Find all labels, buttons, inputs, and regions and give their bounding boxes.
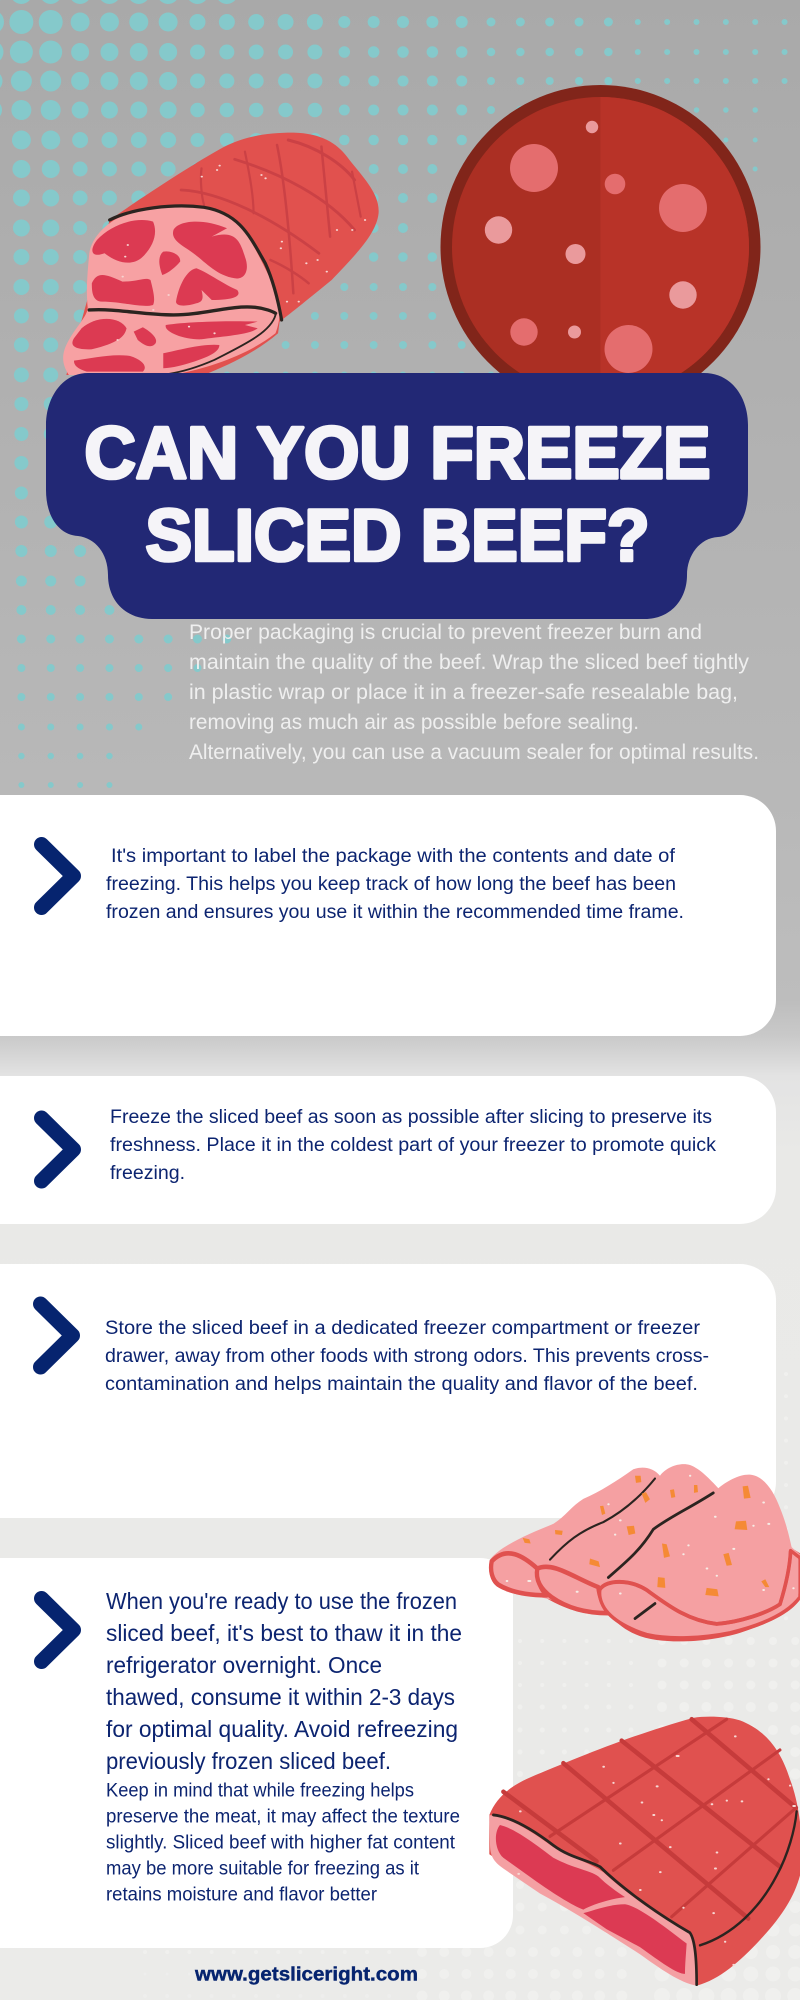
- teal halftone dots: [0, 0, 785, 785]
- icon: chevron 1: [42, 844, 74, 908]
- text: thawing tip: previously frozen sliced beef.: [106, 1748, 391, 1774]
- intro paragraph: maintain the quality of the beef. Wrap the sliced beef tightly: [189, 651, 750, 674]
- text: storage tip: drawer, away from other foods with strong odors. This prevents cross-: [105, 1346, 709, 1367]
- panel: freeze quickly tip: [0, 1076, 776, 1224]
- illustration: pink ham slices: [489, 1464, 800, 1641]
- text: storage tip: contamination and helps maintain the quality and flavor of the beef.: [105, 1374, 698, 1395]
- title text: [84, 413, 710, 576]
- footer website link: www.getsliceright.com: [194, 1964, 418, 1986]
- text: thawing tip: slightly. Sliced beef with higher fat content: [106, 1832, 456, 1854]
- intro paragraph: in plastic wrap or place it in a freezer-safe resealable bag,: [189, 681, 738, 704]
- illustration: round salami slice: [440, 85, 760, 409]
- intro paragraph: Alternatively, you can use a vacuum sealer for optimal results.: [189, 741, 759, 764]
- text: labelling tip: frozen and ensures you use it within the recommended time frame.: [106, 902, 684, 923]
- text: labelling tip: [106, 846, 684, 923]
- text: thawing tip: for optimal quality. Avoid refreezing: [106, 1716, 458, 1742]
- title text: CAN YOU FREEZE: [84, 413, 710, 494]
- text: thawing tip: thawed, consume it within 2-3 days: [106, 1684, 455, 1710]
- white dots lower right: [145, 1374, 800, 1996]
- text: thawing tip: refrigerator overnight. Once: [106, 1652, 382, 1678]
- illustration: beef steak with crosshatch: [489, 1717, 800, 1986]
- panel: thawing tip: [0, 1558, 513, 1948]
- title banner: [46, 373, 748, 619]
- text: freeze quickly tip: freshness. Place it in the coldest part of your freezer to promote quick: [110, 1135, 717, 1156]
- title text: SLICED BEEF?: [146, 496, 650, 576]
- text: thawing tip: retains moisture and flavor better: [106, 1884, 377, 1906]
- text: thawing tip: sliced beef, it's best to thaw it in the: [106, 1620, 462, 1646]
- text: labelling tip: It's important to label the package with the contents and date of: [111, 846, 676, 867]
- text: thawing tip: [106, 1588, 462, 1906]
- panel: storage tip: [0, 1264, 776, 1518]
- text: labelling tip: freezing. This helps you keep track of how long the beef has been: [106, 874, 676, 895]
- text: thawing tip: may be more suitable for freezing as it: [106, 1858, 420, 1880]
- icon: chevron 4: [42, 1598, 74, 1662]
- text: freeze quickly tip: [110, 1107, 717, 1184]
- text: storage tip: Store the sliced beef in a dedicated freezer compartment or freezer: [105, 1318, 701, 1339]
- icon: chevron 2: [42, 1118, 74, 1181]
- intro paragraph: removing as much air as possible before sealing.: [189, 711, 639, 734]
- text: thawing tip: When you're ready to use the frozen: [106, 1588, 457, 1614]
- intro paragraph: Proper packaging is crucial to prevent freezer burn and: [189, 621, 702, 644]
- illustration: beef roast with marbled cut face: [63, 133, 379, 375]
- panel: labelling tip: [0, 795, 776, 1036]
- text: freeze quickly tip: freezing.: [110, 1163, 185, 1184]
- text: storage tip: [105, 1318, 709, 1395]
- icon: chevron 3: [40, 1304, 72, 1367]
- text: freeze quickly tip: Freeze the sliced beef as soon as possible after slicing to preserve its: [110, 1107, 712, 1128]
- intro paragraph: [189, 621, 759, 764]
- text: thawing tip: preserve the meat, it may affect the texture: [106, 1806, 460, 1828]
- text: thawing tip: Keep in mind that while freezing helps: [106, 1780, 414, 1802]
